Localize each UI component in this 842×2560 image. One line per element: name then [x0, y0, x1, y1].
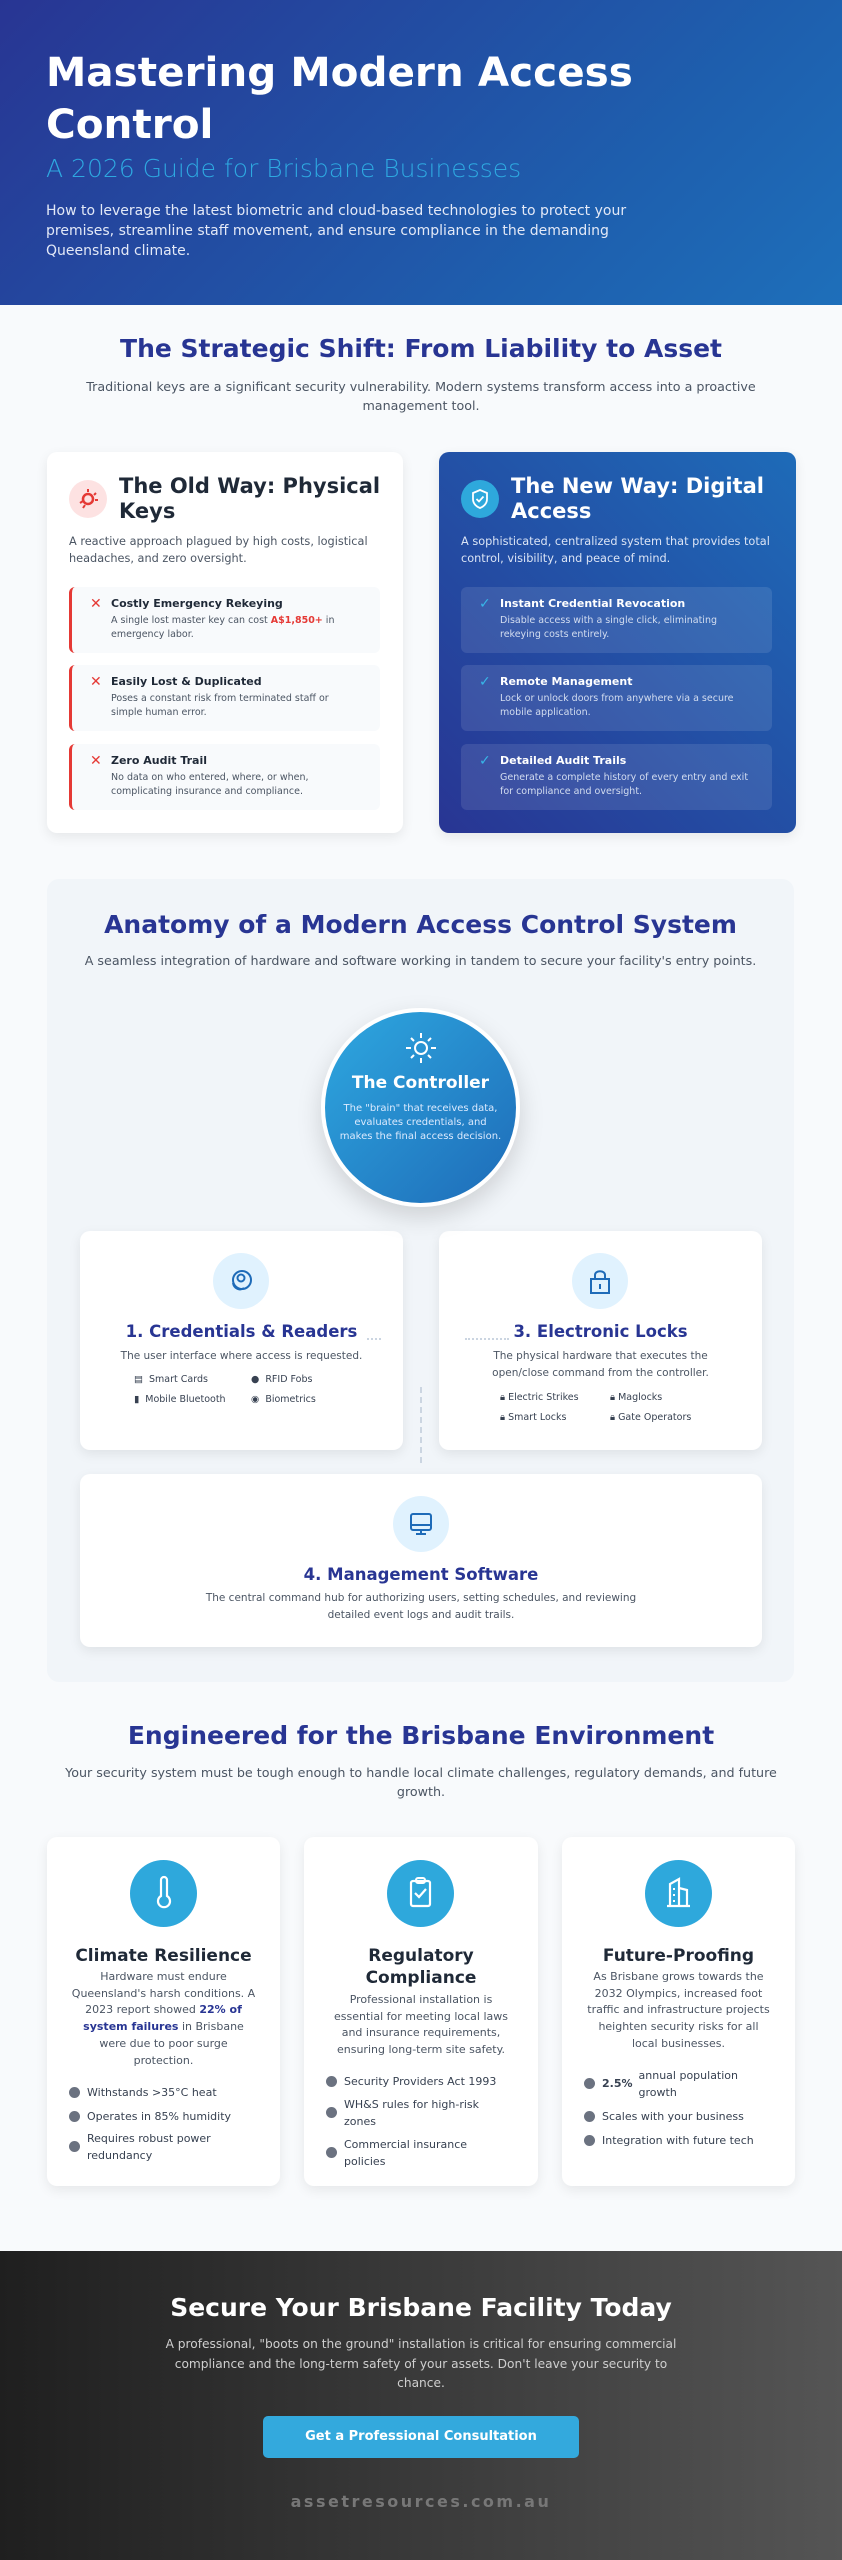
checklist: Scales with your business: [602, 2110, 744, 2123]
description: makes the final access decision.: [340, 1131, 501, 1142]
heading: brisbane environment: Engineered for the Brisbane Environment: [128, 1721, 714, 1750]
title: Mastering Modern Access: [46, 48, 633, 96]
item: remote: [461, 665, 772, 731]
title: [46, 48, 633, 148]
title: Control: [46, 100, 213, 148]
icon: thermometer: [130, 1860, 196, 1927]
body: [334, 1993, 508, 2056]
description: A reactive approach plagued by high costs, logistical: [69, 535, 368, 548]
icon: fingerprint: [213, 1253, 269, 1309]
card: future proofing: [562, 1837, 795, 2186]
heading: Secure Your Brisbane Facility Today: [170, 2293, 672, 2322]
heading: The Old Way: Physical: [119, 474, 380, 498]
item: rekeying: [69, 587, 380, 653]
body: Queensland's harsh conditions. A: [72, 1987, 255, 2000]
controller circle: [321, 1008, 520, 1207]
card: locks: [439, 1231, 762, 1450]
card: management software: [80, 1474, 762, 1647]
item: rekeying: emergency labor.: [111, 629, 194, 640]
item: audit: complicating insurance and compliance.: [111, 786, 303, 797]
title: 3. Electronic Locks: [513, 1322, 688, 1341]
body: Professional installation is: [350, 1993, 492, 2006]
checklist: policies: [344, 2154, 385, 2168]
list: lock types: 🔒︎ Gate Operators: [610, 1412, 691, 1423]
body: local businesses.: [632, 2037, 725, 2050]
list: credential types: ▤ Smart Cards: [134, 1374, 208, 1385]
icon: monitor: [393, 1496, 449, 1552]
body: essential for meeting local laws: [334, 2010, 508, 2023]
item: audit trails: for compliance and oversight.: [500, 786, 642, 797]
text: strategic intro: [86, 379, 756, 413]
item: revocation: [461, 587, 772, 653]
heading: [119, 474, 380, 523]
description: The physical hardware that executes the: [493, 1350, 708, 1362]
description: [340, 1103, 501, 1142]
connector: dotted right: [465, 1338, 509, 1340]
body: [72, 1970, 255, 2067]
checklist: redundancy: [87, 2148, 152, 2162]
item: revocation: rekeying costs entirely.: [500, 629, 609, 640]
panel: new way: [439, 452, 796, 833]
button: Get a Professional Consultation: [305, 2429, 537, 2444]
item: audit: No data on who entered, where, or when,: [111, 772, 309, 783]
body: system failures in Brisbane: [83, 2020, 244, 2033]
checklist: 2.5%: [602, 2077, 633, 2090]
item: audit: Zero Audit Trail: [111, 754, 207, 767]
icon: broken key: [69, 480, 107, 518]
title: The Controller: [352, 1073, 489, 1093]
item: audit: [69, 744, 380, 810]
checklist: Integration with future tech: [602, 2134, 754, 2147]
body: traffic and infrastructure projects: [587, 2003, 770, 2016]
item: lost: [69, 665, 380, 731]
intro text: premises, streamline staff movement, and ensure compliance in the demanding: [46, 223, 609, 239]
footer CTA: [0, 2251, 842, 2560]
item: rekeying: ✕: [90, 596, 102, 612]
body: 2023 report showed 22% of: [85, 2003, 242, 2016]
title: 4. Management Software: [304, 1565, 538, 1584]
panel: environment cards: [46, 1853, 796, 2191]
text: environment intro: [65, 1765, 777, 1799]
description: headaches, and zero oversight.: [69, 552, 247, 565]
title: Regulatory: [368, 1946, 474, 1966]
list: credential types: ◉ Biometrics: [251, 1394, 316, 1405]
description: evaluates credentials, and: [354, 1117, 487, 1128]
item: remote: Remote Management: [500, 675, 632, 688]
text: [166, 2337, 676, 2390]
subtitle: A 2026 Guide for Brisbane Businesses: [46, 154, 521, 183]
list: credential types: ▮ Mobile Bluetooth: [134, 1394, 226, 1405]
description: control, visibility, and peace of mind.: [461, 552, 670, 565]
body: protection.: [134, 2054, 193, 2067]
title: 1. Credentials & Readers: [126, 1322, 357, 1341]
heading: Anatomy of a Modern Access Control System: [104, 910, 737, 939]
item: audit trails: [461, 744, 772, 810]
item: lost: ✕: [90, 674, 102, 690]
card: credentials: [80, 1231, 403, 1450]
checklist: Security Providers Act 1993: [344, 2075, 496, 2088]
checklist: Requires robust power: [87, 2132, 211, 2145]
item: remote: Lock or unlock doors from anywhere via a secure: [500, 693, 734, 704]
body: ensuring long-term site safety.: [337, 2043, 505, 2056]
item: remote: ✓: [479, 674, 491, 690]
text: strategic intro: Traditional keys are a significant security vulnerability. Modern systems transform access into a proactive: [86, 379, 756, 394]
connector: dashed vertical: [420, 1387, 422, 1463]
description: detailed event logs and audit trails.: [328, 1609, 514, 1621]
title: Climate Resilience: [75, 1946, 252, 1966]
connector: dotted left: [367, 1338, 381, 1340]
list: lock types: [500, 1392, 691, 1423]
item: audit trails: Detailed Audit Trails: [500, 754, 626, 767]
card: regulatory: [304, 1837, 538, 2186]
body: 2032 Olympics, increased foot: [595, 1987, 762, 2000]
panel: old way: [47, 452, 403, 833]
description: [461, 535, 770, 565]
list: lock types: 🔒︎ Maglocks: [610, 1392, 662, 1403]
icon: building: [644, 1860, 712, 1927]
button: [263, 2416, 579, 2458]
text: strategic intro: management tool.: [362, 398, 480, 413]
checklist: [584, 2069, 754, 2147]
item: revocation: ✓: [479, 596, 491, 612]
icon: lock: [572, 1253, 628, 1309]
title: [366, 1946, 476, 1988]
icon: chip/bulb: [406, 1033, 436, 1063]
checklist: Withstands >35°C heat: [87, 2086, 217, 2099]
body: As Brisbane grows towards the: [593, 1970, 764, 1983]
item: lost: Easily Lost & Duplicated: [111, 675, 262, 688]
intro text: [46, 203, 626, 259]
list: credential types: [134, 1374, 316, 1405]
icon: shield: [461, 480, 499, 518]
item: revocation: Instant Credential Revocation: [500, 597, 685, 610]
heading: strategic shift: The Strategic Shift: From Liability to Asset: [120, 334, 722, 363]
icon: clipboard: [387, 1860, 454, 1927]
header: [0, 0, 842, 305]
description: The central command hub for authorizing users, setting schedules, and reviewing: [206, 1592, 636, 1604]
heading: Keys: [119, 499, 175, 523]
heading: The New Way: Digital: [511, 474, 764, 498]
checklist: annual population: [639, 2069, 738, 2082]
checklist: WH&S rules for high-risk: [344, 2098, 479, 2111]
text: environment intro: growth.: [397, 1784, 445, 1799]
checklist: Operates in 85% humidity: [87, 2110, 231, 2123]
item: revocation: Disable access with a single click, eliminating: [500, 615, 717, 626]
description: [492, 1350, 709, 1379]
checklist: growth: [639, 2086, 677, 2098]
description: A sophisticated, centralized system that provides total: [461, 535, 770, 548]
description: open/close command from the controller.: [492, 1367, 709, 1379]
heading: Access: [511, 499, 591, 523]
item: lost: simple human error.: [111, 707, 207, 718]
checklist: Commercial insurance: [344, 2138, 467, 2151]
text: compliance and the long-term safety of your assets. Don't leave your security to: [175, 2356, 667, 2370]
item: audit trails: ✓: [479, 753, 491, 769]
item: lost: Poses a constant risk from terminated staff or: [111, 693, 329, 704]
item: audit trails: Generate a complete history of every entry and exit: [500, 772, 748, 783]
description: [206, 1592, 636, 1621]
item: rekeying: Costly Emergency Rekeying: [111, 597, 283, 610]
body: and insurance requirements,: [342, 2026, 500, 2039]
title: Compliance: [366, 1968, 476, 1988]
heading: [511, 474, 764, 523]
list: lock types: 🔒︎ Electric Strikes: [500, 1392, 579, 1403]
item: rekeying: A single lost master key can cost A$1,850+ in: [111, 615, 334, 626]
body: were due to poor surge: [99, 2037, 228, 2050]
body: [587, 1970, 770, 2050]
domain: assetresources.com.au: [291, 2492, 551, 2511]
description: [69, 535, 368, 565]
description: The "brain" that receives data,: [344, 1103, 497, 1114]
description: The user interface where access is requested.: [121, 1350, 362, 1362]
list: credential types: ● RFID Fobs: [251, 1374, 312, 1385]
panel: anatomy: [47, 879, 794, 1682]
item: audit: ✕: [90, 753, 102, 769]
intro text: How to leverage the latest biometric and cloud-based technologies to protect your: [46, 203, 626, 219]
checklist: [69, 2086, 231, 2162]
subtitle: A seamless integration of hardware and software working in tandem to secure your facility's entry points.: [85, 953, 756, 968]
text: A professional, "boots on the ground" installation is critical for ensuring commercial: [166, 2337, 676, 2351]
item: remote: mobile application.: [500, 707, 591, 718]
list: lock types: 🔒︎ Smart Locks: [500, 1412, 566, 1423]
body: Hardware must endure: [100, 1970, 227, 1983]
body: heighten security risks for all: [598, 2020, 759, 2033]
text: environment intro: Your security system must be tough enough to handle local climate challenges, regulatory demands, and future: [65, 1765, 777, 1780]
checklist: zones: [344, 2114, 376, 2128]
card: climate: [47, 1837, 280, 2186]
text: chance.: [397, 2376, 445, 2390]
intro text: Queensland climate.: [46, 243, 190, 259]
checklist: [326, 2075, 496, 2168]
title: Future-Proofing: [603, 1946, 754, 1966]
